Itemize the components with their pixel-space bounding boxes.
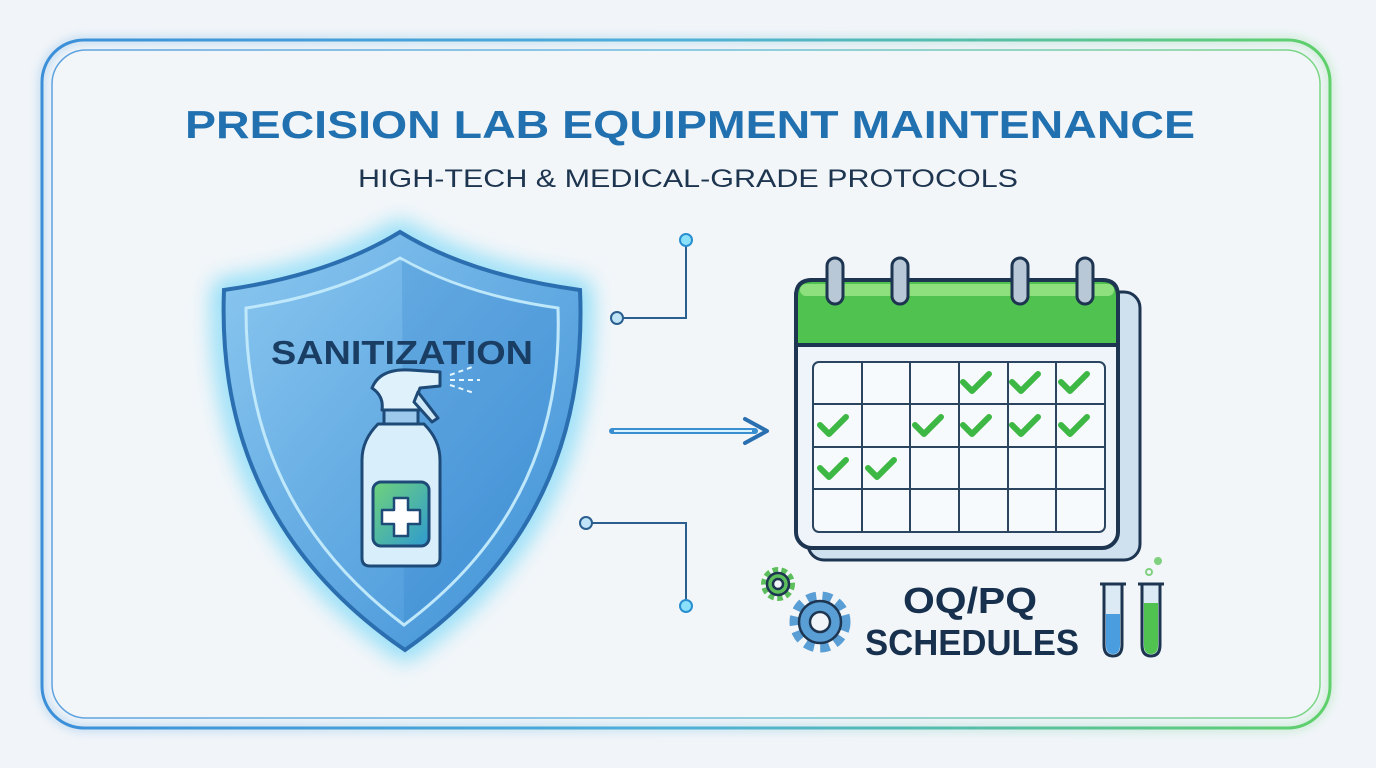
grid bbox=[813, 362, 1105, 532]
icon: spray bottle bbox=[362, 370, 440, 566]
connector top bbox=[611, 234, 692, 324]
OQ/PQ label: SCHEDULES bbox=[865, 622, 1079, 663]
arrow bbox=[612, 419, 767, 443]
checkmarks bbox=[820, 374, 1087, 477]
OQ/PQ label: OQ/PQ bbox=[903, 580, 1037, 621]
shield: sanitization bbox=[224, 232, 581, 650]
connector bottom bbox=[580, 517, 692, 612]
calendar bbox=[796, 258, 1140, 560]
icon: gears bbox=[765, 571, 845, 647]
OQ/PQ label bbox=[865, 580, 1079, 663]
icon: test tubes bbox=[1100, 557, 1164, 656]
rings bbox=[827, 258, 1093, 304]
shield label: SANITIZATION bbox=[271, 334, 533, 371]
subtitle: HIGH-TECH & MEDICAL-GRADE PROTOCOLS bbox=[358, 165, 1018, 193]
title: PRECISION LAB EQUIPMENT MAINTENANCE bbox=[185, 104, 1195, 147]
